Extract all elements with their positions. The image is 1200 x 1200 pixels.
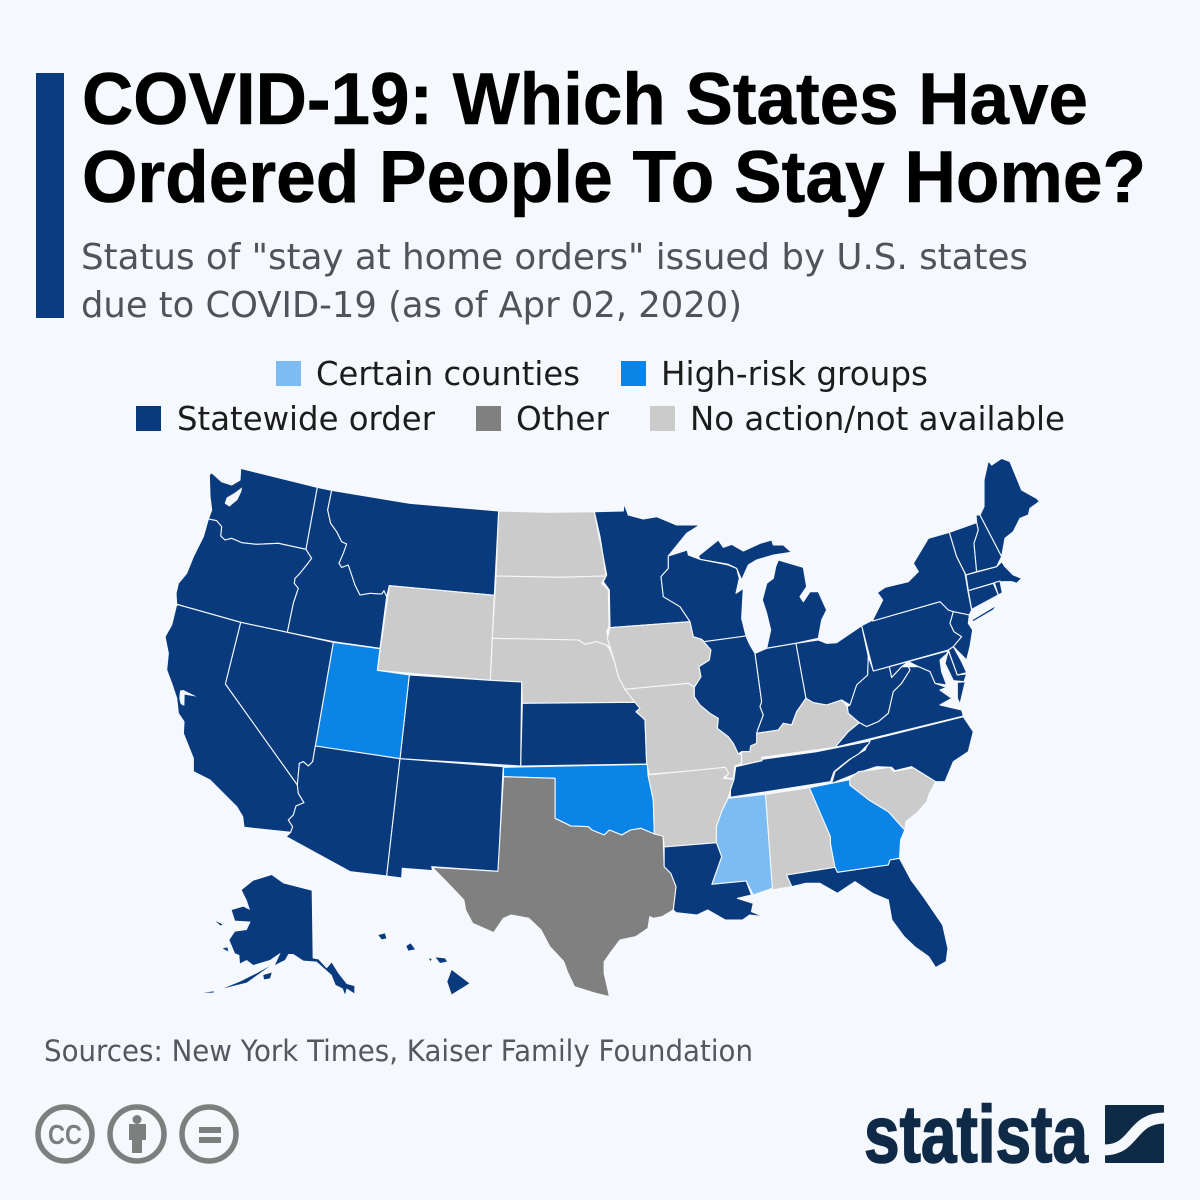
- legend item: high-risk groups: High-risk groups: [661, 354, 928, 393]
- Illinois: [694, 636, 763, 754]
- Rhode Island: [994, 581, 1002, 595]
- statista wordmark: statista: [864, 1090, 1089, 1180]
- South Carolina: [850, 767, 936, 830]
- Mississippi: [712, 794, 773, 895]
- Indiana: [755, 643, 806, 733]
- Arkansas: [648, 767, 734, 847]
- Florida: [787, 858, 948, 968]
- California: [165, 604, 304, 832]
- Kentucky: [742, 698, 859, 765]
- Alaska and Hawaii: [203, 875, 469, 994]
- Virginia: [835, 667, 963, 747]
- North Carolina: [832, 717, 973, 783]
- Virginia eastern shore: [957, 682, 965, 704]
- Montana: [328, 490, 499, 597]
- Michigan lower peninsula: [762, 560, 827, 648]
- Georgia: [809, 779, 905, 872]
- Hawaii: [378, 933, 469, 994]
- Connecticut: [968, 583, 998, 609]
- North Dakota: [496, 511, 606, 577]
- Vermont: [949, 523, 978, 575]
- Colorado: [400, 675, 522, 766]
- western and plains states: [165, 468, 647, 878]
- icon: no derivatives: [182, 1107, 236, 1161]
- Alabama: [766, 788, 835, 890]
- Oklahoma: [503, 764, 654, 835]
- New Jersey: [950, 612, 973, 660]
- Washington: [208, 468, 317, 549]
- Ohio: [796, 626, 868, 705]
- accent bar: [36, 73, 64, 318]
- icon: creative commons: [38, 1107, 92, 1161]
- New Hampshire: [974, 515, 1002, 572]
- midwest and northeast states: [594, 458, 1039, 783]
- Puget Sound: [225, 487, 242, 507]
- Iowa: [607, 622, 711, 689]
- San Francisco Bay: [179, 690, 197, 706]
- legend item: other: [476, 399, 609, 438]
- southern states: [432, 741, 948, 997]
- Pennsylvania: [862, 602, 962, 671]
- Utah: [315, 642, 409, 759]
- subtitle: [81, 237, 1028, 326]
- South Dakota: [492, 576, 610, 647]
- Tennessee: [730, 741, 870, 797]
- subtitle: Status of "stay at home orders" issued by U.S. states: [81, 237, 1028, 278]
- Maine: [980, 458, 1039, 557]
- Maryland western part: [889, 651, 948, 685]
- legend item: other: Other: [516, 399, 609, 438]
- icon: creative commons: CC: [48, 1119, 82, 1150]
- Nevada: [225, 622, 333, 785]
- Idaho: [287, 487, 387, 648]
- Massachusetts: [966, 562, 1022, 591]
- Maryland eastern shore: [945, 651, 967, 682]
- Louisiana: [664, 843, 764, 920]
- statista logo mark: [1104, 1105, 1165, 1163]
- title: Ordered People To Stay Home?: [82, 137, 1146, 218]
- Kansas: [521, 702, 647, 766]
- Wisconsin: [661, 550, 746, 642]
- Texas: [432, 777, 676, 997]
- legend item: no action/not available: No action/not available: [690, 399, 1065, 438]
- subtitle: due to COVID-19 (as of Apr 02, 2020): [81, 285, 742, 326]
- legend item: certain counties: Certain counties: [316, 354, 580, 393]
- Oregon: [176, 519, 312, 632]
- Michigan upper peninsula: [698, 540, 792, 580]
- Minnesota: [594, 503, 700, 628]
- New York: [873, 532, 972, 621]
- Long Island: [972, 605, 997, 622]
- title: COVID-19: Which States Have: [82, 59, 1088, 140]
- New Mexico: [387, 759, 503, 878]
- Wyoming: [377, 586, 494, 680]
- West Virginia: [847, 657, 910, 727]
- Alaska: [203, 875, 354, 994]
- Nebraska: [490, 638, 635, 703]
- Arizona: [286, 746, 400, 876]
- map of U.S. states: [165, 458, 1039, 997]
- Delaware: [948, 647, 967, 675]
- Missouri: [625, 683, 742, 778]
- legend: [136, 354, 1065, 438]
- legend item: statewide order: Statewide order: [177, 399, 435, 438]
- source note: Sources: New York Times, Kaiser Family Foundation: [44, 1034, 753, 1068]
- icon: attribution: [110, 1107, 164, 1161]
- title: [82, 59, 1146, 218]
